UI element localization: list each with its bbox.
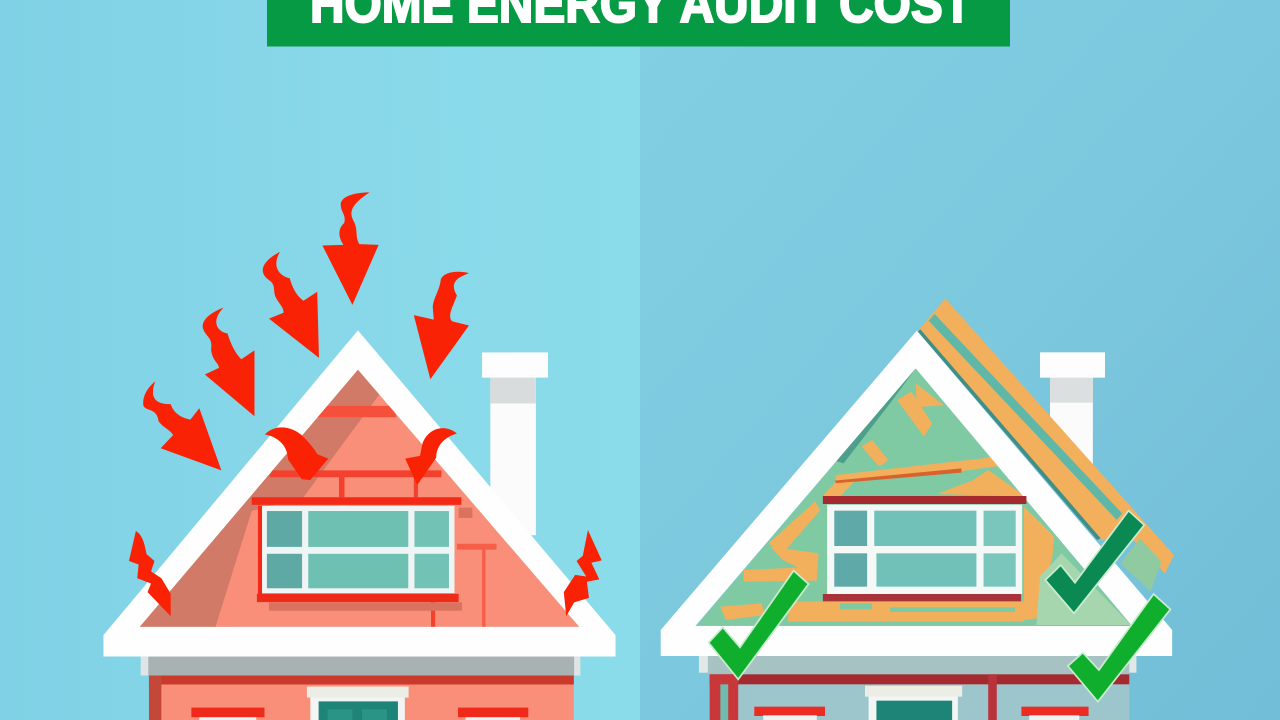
lower wall <box>710 674 1129 720</box>
title banner <box>267 0 1010 46</box>
arrow: eave right <box>564 530 602 616</box>
check marks <box>709 511 1170 702</box>
door <box>865 686 962 720</box>
panel: insulated house <box>661 299 1174 720</box>
lower wall <box>149 676 574 720</box>
arrow: top <box>322 192 379 305</box>
lower windows <box>191 708 528 720</box>
attic window <box>823 496 1026 601</box>
chimney <box>1040 352 1105 477</box>
lower windows <box>754 707 1089 720</box>
arrow: eave left <box>129 531 171 616</box>
check: right <box>1068 594 1170 702</box>
panel: left background <box>0 0 640 720</box>
panel: right background <box>640 0 1280 720</box>
arrow: left <box>203 308 254 416</box>
arrow: right <box>414 272 469 379</box>
chimney <box>482 352 548 535</box>
arrow: ridge left <box>265 427 328 480</box>
roof outline <box>103 330 616 657</box>
gable wall <box>140 370 579 627</box>
door <box>307 687 409 720</box>
arrow: far left <box>143 381 221 470</box>
check: dark center <box>1045 511 1144 613</box>
gable insulation <box>697 368 1131 625</box>
panel: leaky house <box>103 192 616 720</box>
soffit <box>699 656 1136 674</box>
arrow: upper left <box>263 252 319 358</box>
roof outline <box>661 331 1172 656</box>
soffit <box>141 657 580 676</box>
arrow: ridge right <box>405 428 457 485</box>
attic window <box>252 497 461 602</box>
heat leak arrows <box>129 192 602 616</box>
check: left <box>709 571 809 679</box>
exterior insulation layers <box>918 299 1174 592</box>
